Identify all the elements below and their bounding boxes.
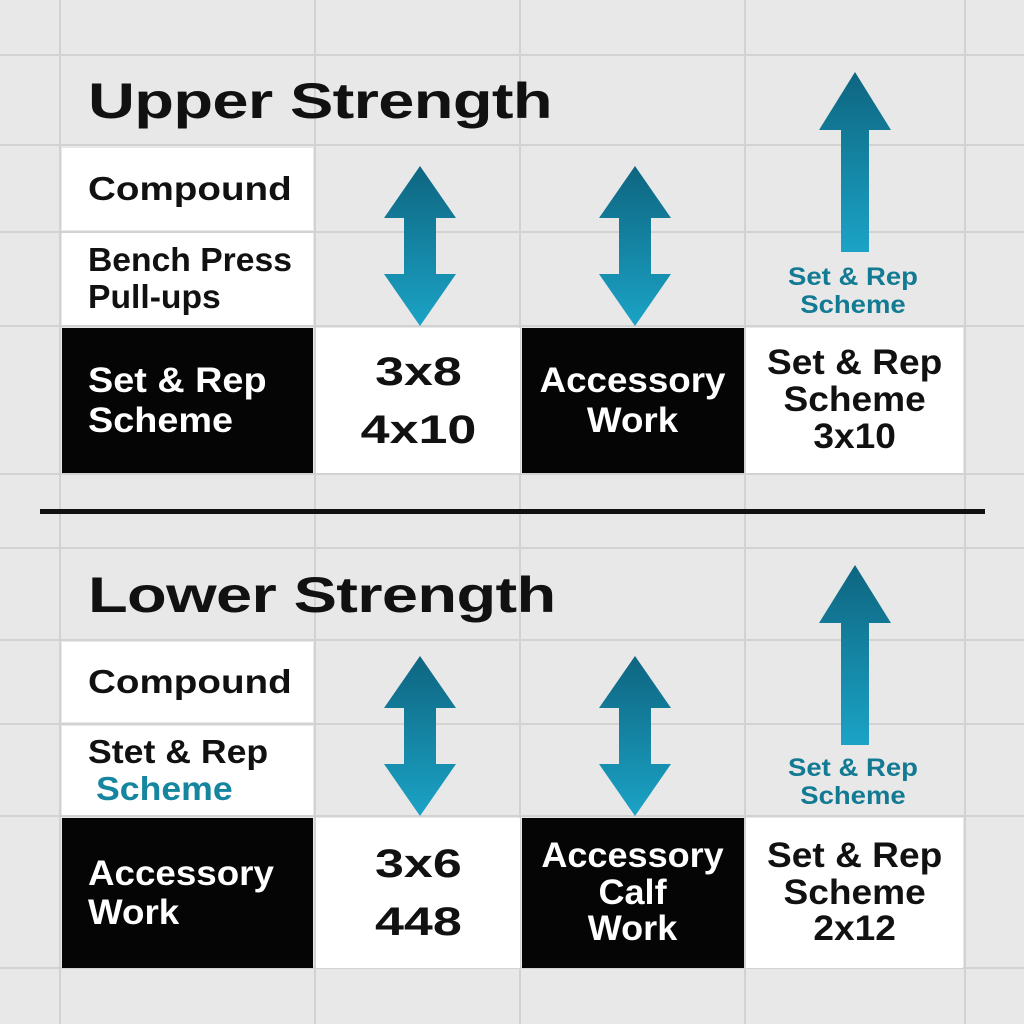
upper compound box: [62, 148, 313, 230]
cell: 3x6 448: 3x6: [375, 842, 461, 886]
cell: 3x8 4x10: [316, 328, 520, 473]
upper exercises box: Pull-ups: [88, 278, 221, 315]
arrow: lower double 2: [599, 656, 671, 816]
divider: [40, 509, 985, 514]
lower compound box: Compound: [88, 663, 292, 700]
lower row: [62, 818, 963, 968]
upper exercises box: Bench Press: [88, 241, 292, 278]
cell: set & rep 3x10: Set & Rep: [767, 343, 942, 382]
arrow: lower up: [819, 565, 891, 745]
upper arrow label: [788, 263, 918, 318]
upper arrow label: Scheme: [800, 290, 906, 318]
lower scheme box: Scheme: [96, 770, 233, 806]
cell: accessory work: [62, 818, 313, 968]
cell: set & rep 3x10: [746, 328, 963, 473]
lower scheme box: [62, 726, 313, 815]
cell: accessory work: Work: [88, 893, 179, 932]
cell: accessory work: Work: [587, 400, 679, 440]
upper compound box: Compound: [88, 170, 292, 207]
cell: set & rep 2x12: [746, 818, 963, 968]
upper row: [62, 328, 963, 473]
lower arrow label: Scheme: [800, 782, 906, 810]
cell: accessory calf work: Work: [588, 909, 678, 948]
lower scheme box: Stet & Rep: [88, 733, 268, 770]
upper exercises box: [62, 233, 313, 325]
title: upper strength: Upper Strength: [88, 73, 552, 129]
cell: set & rep 2x12: Set & Rep: [767, 836, 942, 875]
cell: accessory work: Accessory: [540, 361, 726, 400]
cell: accessory work: Accessory: [88, 854, 274, 893]
cell: set & rep 3x10: 3x10: [813, 417, 896, 456]
arrow: upper double 2: [599, 166, 671, 326]
cell: set & rep 3x10: Scheme: [783, 380, 926, 419]
title: lower strength: Lower Strength: [88, 567, 556, 623]
cell: 3x6 448: [316, 818, 520, 968]
arrow: upper double 1: [384, 166, 456, 326]
cell: 3x8 4x10: 3x8: [375, 350, 461, 394]
lower compound box: [62, 642, 313, 722]
cell: set & rep scheme: Scheme: [88, 400, 233, 440]
cell: set & rep 2x12: 2x12: [813, 909, 896, 948]
arrow: lower double 1: [384, 656, 456, 816]
cell: 3x8 4x10: 4x10: [360, 408, 476, 452]
cell: set & rep 2x12: Scheme: [783, 873, 926, 912]
cell: accessory calf work: Calf: [599, 873, 667, 912]
arrow: upper up: [819, 72, 891, 252]
cell: accessory calf work: [522, 818, 744, 968]
lower arrow label: Set & Rep: [788, 754, 918, 782]
lower arrow label: [788, 754, 918, 810]
cell: set & rep scheme: Set & Rep: [88, 361, 267, 400]
cell: accessory work: [522, 328, 744, 473]
cell: set & rep scheme: [62, 328, 313, 473]
cell: 3x6 448: 448: [375, 900, 461, 944]
upper arrow label: Set & Rep: [788, 263, 918, 291]
cell: accessory calf work: Accessory: [542, 836, 724, 875]
